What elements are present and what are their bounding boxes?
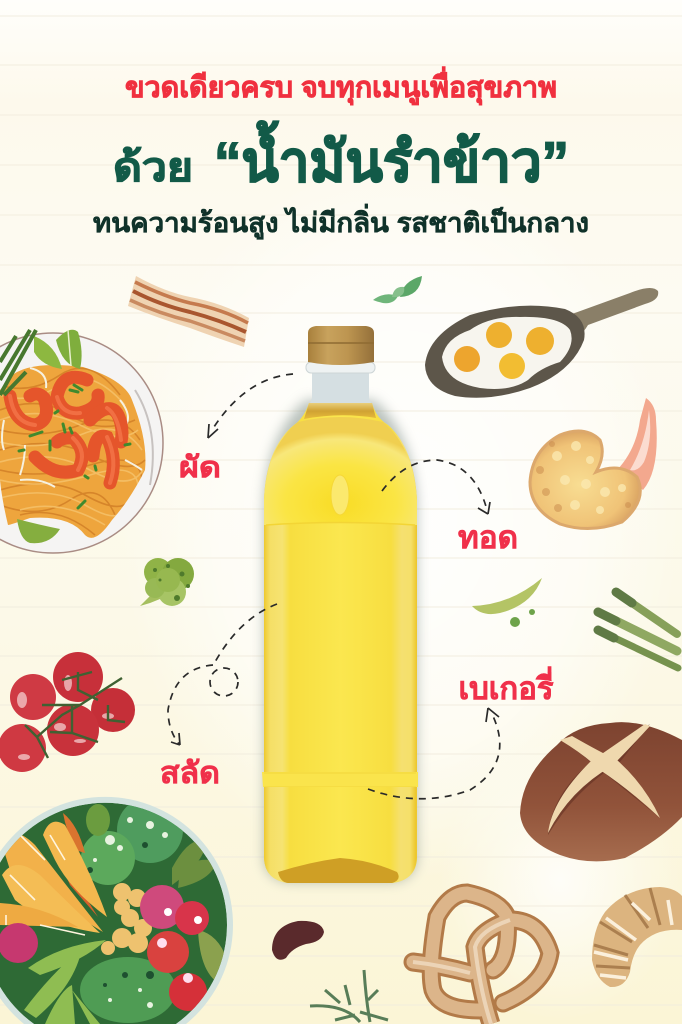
icon: noodle plate xyxy=(0,330,163,553)
arrow: to fry xyxy=(382,460,490,514)
title: green headline xyxy=(113,121,569,193)
icon: fried shrimp xyxy=(530,398,657,529)
icon: frying pan with eggs xyxy=(425,288,658,398)
arrow: to stir fry xyxy=(208,374,293,438)
icon: asparagus xyxy=(598,592,678,668)
icon: rosemary xyxy=(310,970,388,1022)
label: fry: ทอด xyxy=(458,520,518,555)
icon: broccoli xyxy=(140,558,194,606)
icon: cherry tomatoes xyxy=(0,652,135,772)
label: salad: สลัด xyxy=(160,757,220,790)
bottle cap xyxy=(308,326,374,365)
title: red headline: ขวดเดียวครบ จบทุกเมนูเพื่อสุขภาพ xyxy=(125,66,557,105)
arrow: to bakery xyxy=(368,708,500,799)
label: stir fry: ผัด xyxy=(179,452,221,484)
icon: bread loaf xyxy=(520,722,682,861)
subtitle: ทนความร้อนสูง ไม่มีกลิ่น รสชาติเป็นกลาง xyxy=(93,203,589,240)
icon: pea pod xyxy=(472,578,542,627)
title: green headline: “น้ำมันรำข้าว” xyxy=(214,121,569,193)
arrow: to salad xyxy=(168,604,277,745)
title: green headline: ด้วย xyxy=(113,146,193,190)
bottle neck xyxy=(309,370,372,406)
icon: salad bowl xyxy=(0,797,233,1024)
icon: mint leaves xyxy=(373,276,422,303)
oil bottle xyxy=(262,326,418,883)
icon: pretzel xyxy=(413,893,550,1024)
oil body xyxy=(264,403,417,883)
bottle collar xyxy=(306,362,375,373)
icon: kidney bean xyxy=(272,921,324,960)
icon: bacon xyxy=(128,276,249,347)
label: bakery: เบเกอรี่ xyxy=(458,666,554,706)
icon: croissant xyxy=(592,887,682,987)
